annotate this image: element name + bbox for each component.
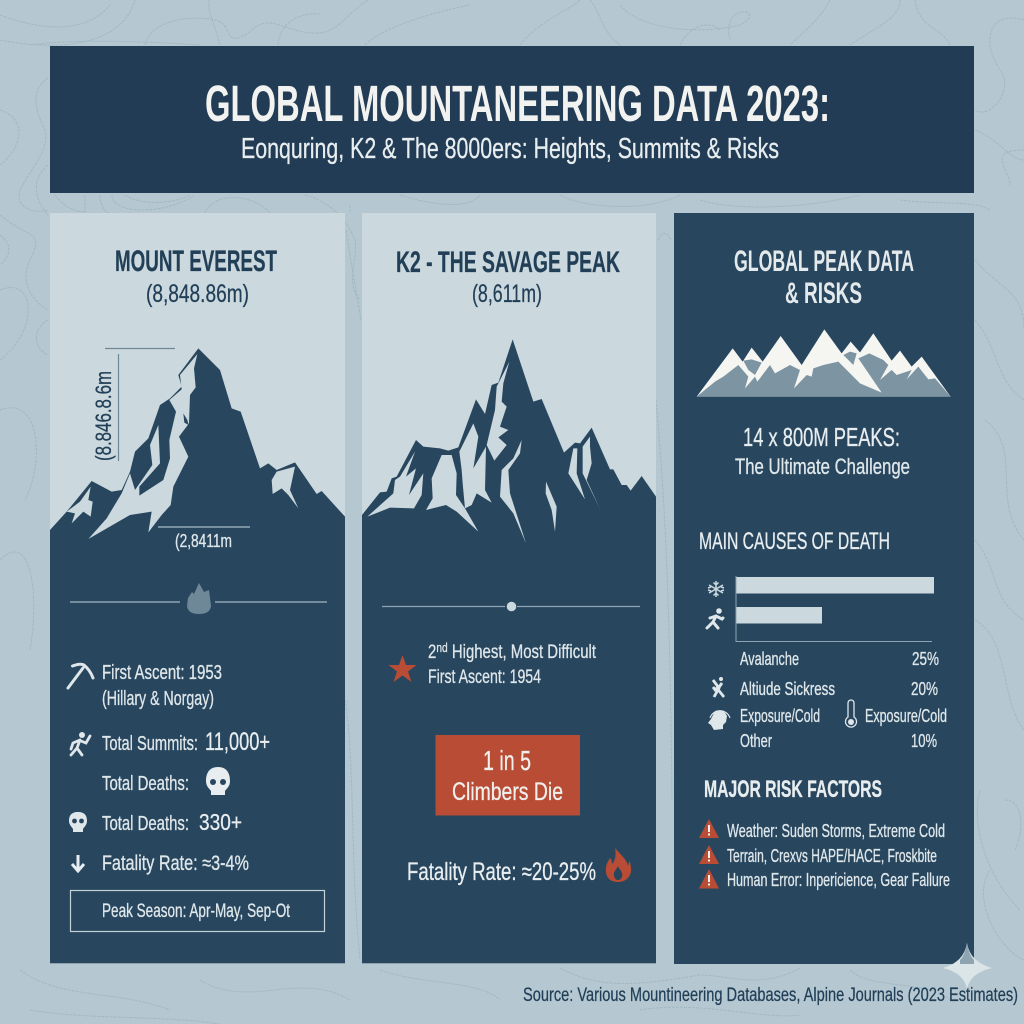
- vertical height label: (8.846.8.6m: [91, 371, 116, 461]
- other value: 10%: [911, 731, 937, 751]
- mountain range illustration: [697, 329, 951, 397]
- divider with flame: [70, 583, 327, 614]
- K2 fatality rate: Fatality Rate: ≈20-25%: [407, 858, 596, 886]
- risk heading: MAJOR RISK FACTORS: [704, 776, 882, 803]
- icon: down arrow: [72, 855, 84, 871]
- Everest mountain illustration: [50, 348, 345, 963]
- K2 rank: 2: [428, 642, 439, 663]
- callout: 1 in 5 climbers die: [436, 735, 580, 816]
- icon: ice axe: [68, 664, 93, 688]
- icon: warning 1: [699, 819, 719, 838]
- icon: small skull: [69, 812, 87, 832]
- peak season box: [70, 890, 324, 932]
- total deaths label: Total Deaths:: [102, 773, 189, 795]
- K2 heading: K2 - THE SAVAGE PEAK: [396, 246, 620, 279]
- panel: Mount Everest: [50, 213, 345, 964]
- icon: thermometer: [846, 700, 857, 727]
- first ascent: First Ascent: 1953: [102, 662, 222, 684]
- 14 peaks heading: 14 x 800M PEAKS:: [743, 422, 900, 452]
- global heading line two: & RISKS: [785, 277, 862, 310]
- Everest heading: MOUNT EVEREST: [115, 245, 277, 278]
- total deaths: Total Deaths:: [102, 813, 189, 835]
- bar chart: causes of death: [736, 576, 934, 642]
- climbers: (Hillary & Norgay): [102, 688, 214, 710]
- height dimension lines: [105, 348, 175, 461]
- avalanche row: Avalanche: [740, 649, 799, 669]
- icon: flame: [606, 848, 631, 882]
- panel: K2: [362, 213, 656, 964]
- total summits: Total Summits:: [102, 733, 198, 755]
- callout: 1 in 5 climbers die: Climbers Die: [452, 778, 563, 806]
- icon: climber: [71, 732, 90, 755]
- 14 peaks subheading: The Ultimate Challenge: [735, 454, 910, 479]
- K2 rank: nd: [436, 640, 448, 655]
- subtitle: Eonquring, K2 & The 8000ers: Heights, Summits & Risks: [241, 133, 779, 165]
- sparkle decoration: [943, 943, 992, 989]
- icon: head: [708, 711, 730, 730]
- K2 rank: Highest, Most Difficult: [448, 642, 597, 663]
- K2 mountain illustration: [362, 339, 656, 963]
- causes heading: MAIN CAUSES OF DEATH: [699, 528, 890, 555]
- header banner: [50, 46, 974, 193]
- exposure row left: Exposure/Cold: [740, 706, 820, 726]
- icon: warning 3: [699, 869, 719, 888]
- other row: Other: [740, 731, 772, 751]
- deaths value: 330+: [199, 809, 242, 835]
- icon: snowflake: [708, 581, 724, 597]
- summits value: 11,000+: [205, 728, 270, 756]
- peak season box: Peak Season: Apr-May, Sep-Ot: [102, 901, 291, 922]
- fatality rate: Fatality Rate: ≈3-4%: [102, 852, 249, 875]
- K2 first ascent: First Ascent: 1954: [428, 667, 541, 688]
- icon: red star: [388, 655, 416, 682]
- icon: large skull: [206, 767, 230, 795]
- exposure row right: Exposure/Cold: [865, 706, 947, 726]
- K2 height: (8,611m): [472, 280, 542, 308]
- avalanche value: 25%: [912, 649, 939, 669]
- Everest height: (8,848.86m): [146, 280, 249, 308]
- icon: warning 2: [699, 845, 719, 864]
- callout: 1 in 5 climbers die: 1 in 5: [483, 745, 531, 776]
- icon: running figure: [707, 608, 723, 628]
- altitude value: 20%: [911, 679, 938, 699]
- divider with dot: [382, 602, 640, 611]
- base width label: (2,8411m: [175, 531, 232, 551]
- panel: Global peak data: [674, 213, 974, 964]
- icon: altitude sickness: [713, 677, 724, 697]
- base width line: [158, 526, 250, 528]
- altitude sickness row: Altiude Sickress: [740, 679, 835, 699]
